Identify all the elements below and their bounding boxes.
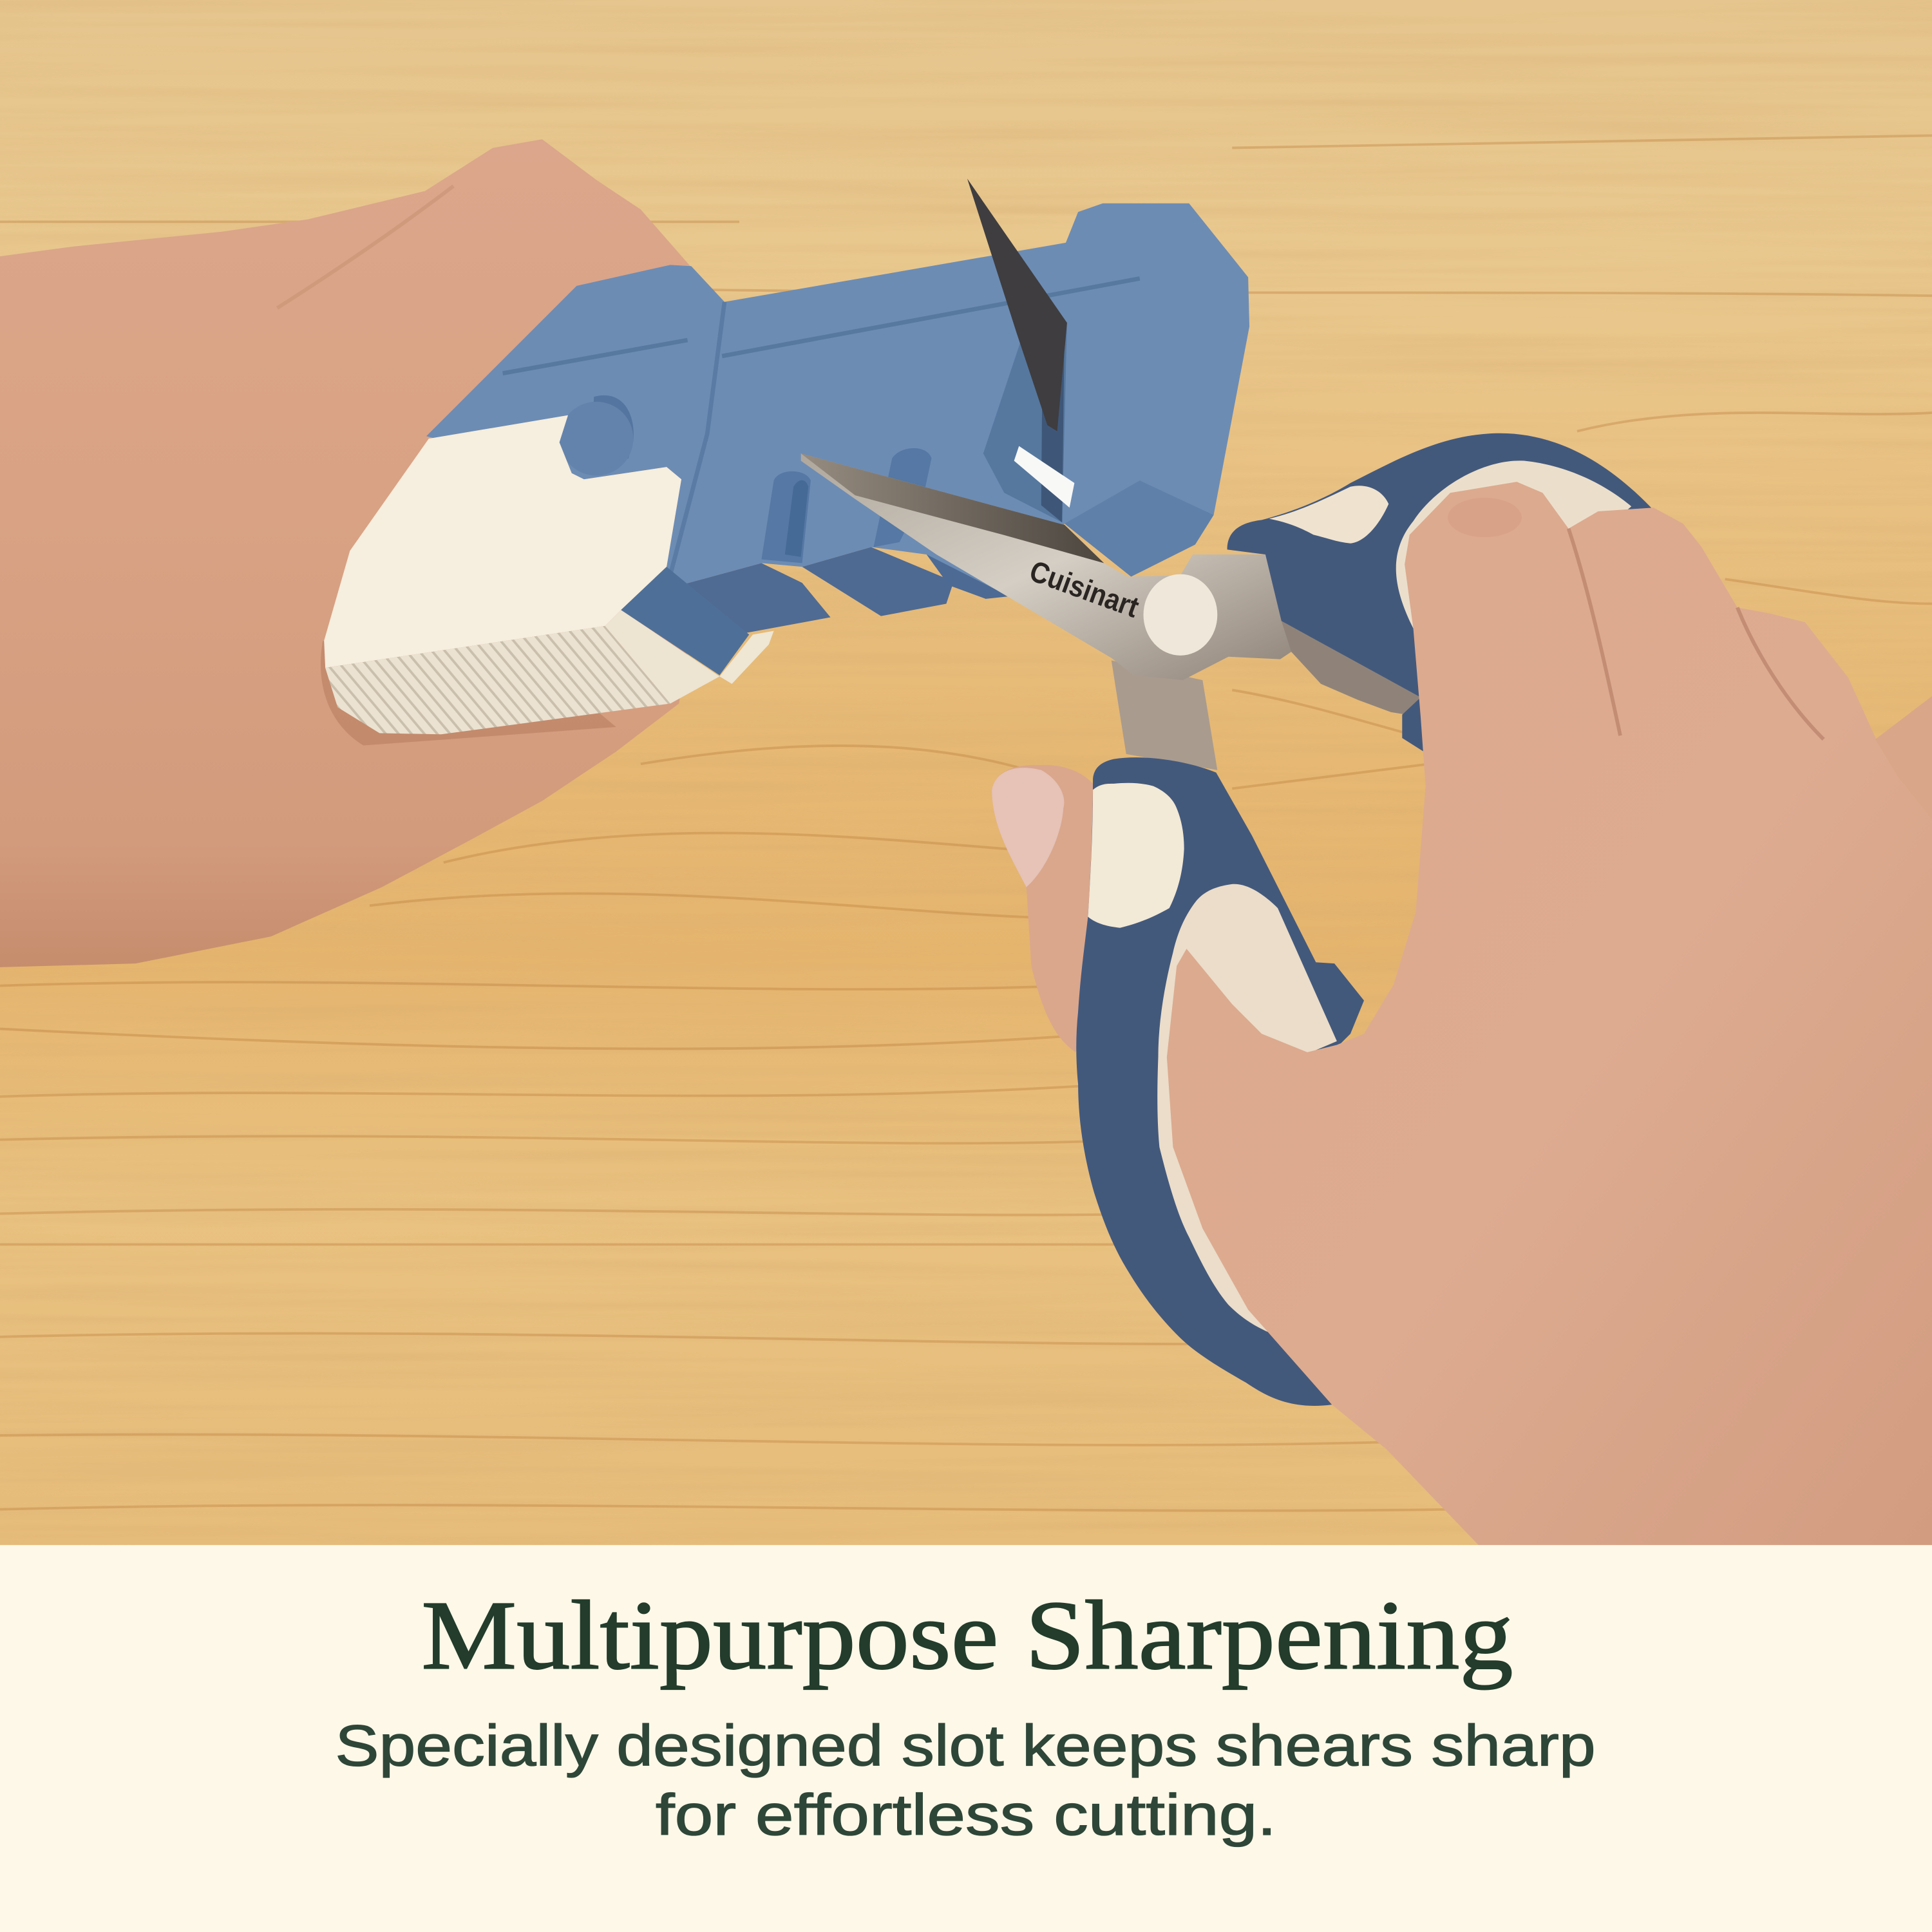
brand mark: Cuisinart bbox=[1025, 554, 1143, 624]
lower blue tab bbox=[621, 567, 749, 675]
small cream lip bbox=[719, 631, 774, 684]
lower handle cream inner bbox=[1157, 884, 1337, 1332]
finger creases bbox=[1569, 529, 1824, 739]
ridged grip bbox=[325, 626, 670, 734]
sharpener: lower blocks bbox=[667, 563, 831, 634]
description: for effortless cutting. bbox=[656, 1783, 1276, 1848]
thumbnail bbox=[992, 768, 1064, 887]
knuckle blush bbox=[1448, 498, 1522, 537]
top handle cream inner bbox=[1396, 460, 1631, 629]
palm shadow bbox=[321, 641, 616, 746]
upper blade and steel body bbox=[801, 453, 1291, 680]
right hand palm and fingers bbox=[1167, 482, 1932, 1545]
white ceramic sharpening rod bbox=[1014, 446, 1074, 507]
heading: Multipurpose Sharpening bbox=[421, 1582, 1513, 1690]
top scissor handle bbox=[1227, 433, 1654, 753]
sharpener: shear slot bbox=[983, 323, 1067, 522]
description bbox=[335, 1714, 1596, 1848]
left hand holding sharpener bbox=[0, 139, 715, 967]
lower blade bbox=[1112, 661, 1217, 770]
lower handle cream patch bbox=[1088, 783, 1184, 928]
sharpener: button recess and button bbox=[591, 395, 634, 475]
sharpener: cream base bbox=[324, 415, 774, 734]
dark shear blade in sharpening slot bbox=[967, 178, 1067, 431]
finger crease bbox=[277, 186, 453, 308]
sharpener: grooves bbox=[503, 278, 1140, 374]
lower scissor handle bbox=[1076, 757, 1364, 1406]
pivot screw bbox=[1144, 574, 1217, 656]
scissors: steel blades bbox=[801, 453, 1422, 770]
dark bevel bbox=[801, 453, 1104, 563]
sharpener: blue body bbox=[426, 204, 1249, 634]
top handle cream patch bbox=[1269, 486, 1388, 544]
sharpener: end cap front bbox=[1065, 480, 1214, 576]
serrated tang bbox=[1282, 621, 1422, 717]
wood cutting board background bbox=[0, 0, 1932, 1545]
sharpener: notches bbox=[761, 471, 811, 563]
footer caption panel bbox=[0, 1545, 1932, 1932]
description: Specially designed slot keeps shears sharp bbox=[335, 1714, 1596, 1779]
right hand thumb bbox=[992, 765, 1109, 1052]
pinky finger bbox=[1875, 696, 1932, 819]
sharpener: rib divider bbox=[667, 302, 724, 589]
